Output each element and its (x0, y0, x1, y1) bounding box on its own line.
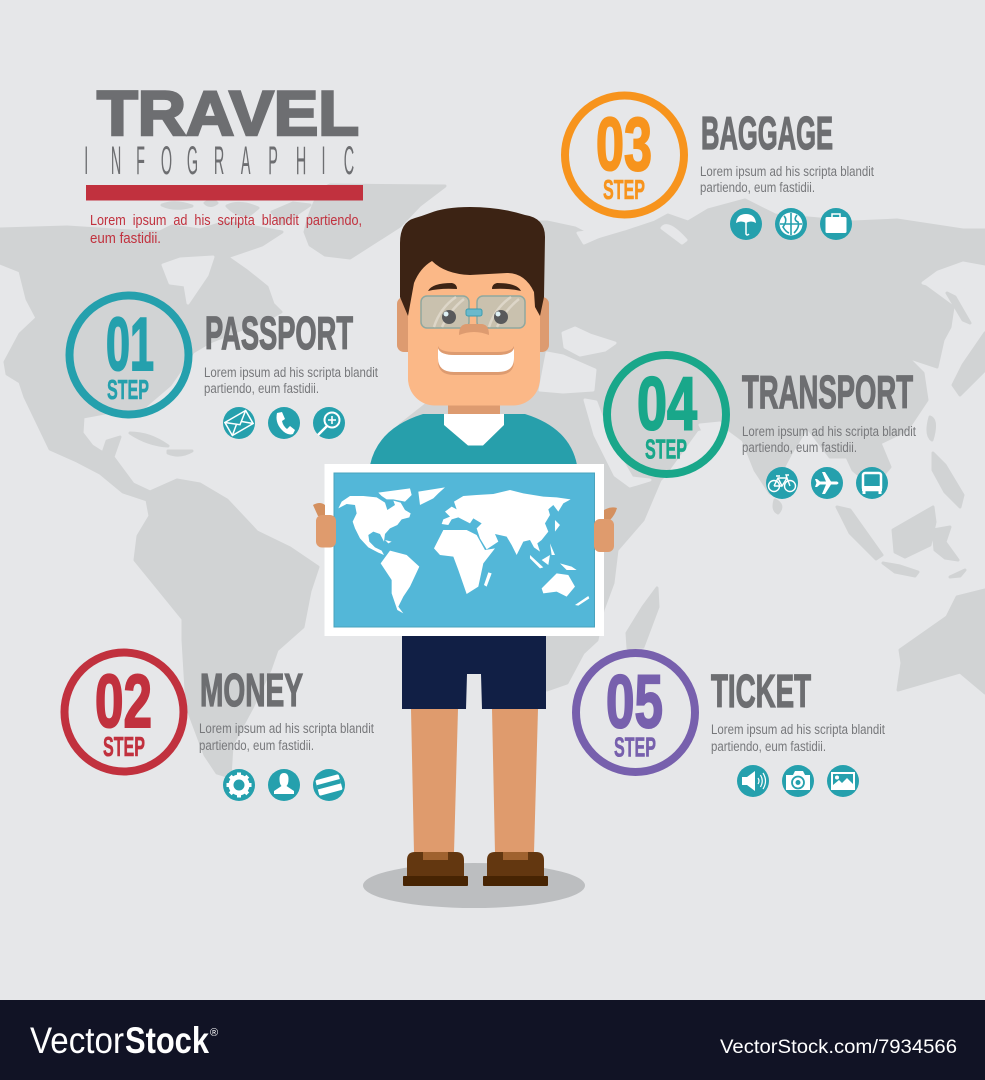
title: travel infographic (84, 79, 363, 247)
subheading: infographic: INFOGRAPHIC (84, 139, 354, 183)
step 02: money (64, 652, 374, 801)
step 03: baggage (565, 96, 874, 240)
heading ticket: TICKET (711, 665, 811, 717)
icon: phone (268, 407, 300, 439)
step ring 01: 01 (106, 302, 154, 386)
step ring 04 (607, 355, 726, 474)
neck (448, 400, 500, 416)
step ring 03: 03 (596, 102, 652, 186)
step ring 03: STEP (603, 174, 645, 205)
step ring 05 (576, 653, 695, 772)
text baggage: Lorem ipsum ad his scripta blandit (700, 164, 874, 179)
icon: bus (856, 467, 888, 499)
step ring 04: STEP (645, 434, 687, 464)
step 05: ticket (576, 653, 885, 797)
text passport (204, 365, 378, 396)
heading passport: PASSPORT (205, 307, 353, 359)
icon: umbrella (730, 208, 762, 240)
title text (90, 213, 362, 247)
step ring 05: 05 (606, 660, 663, 744)
collar (444, 414, 504, 446)
url: VectorStock.com/7934566 (720, 1037, 957, 1058)
icon: briefcase (820, 208, 852, 240)
ears (397, 297, 549, 352)
heading money: MONEY (200, 664, 303, 716)
heading: travel: TRAVEL (97, 79, 359, 149)
logo: ® (210, 1027, 218, 1039)
icon: speaker (737, 765, 769, 797)
step 04: transport (607, 355, 916, 499)
icon: person (268, 769, 300, 801)
step ring 03 (565, 96, 684, 214)
character: man holding map (313, 207, 617, 908)
text passport: partiendo, eum fastidii. (204, 381, 319, 396)
icon: globe (775, 208, 807, 240)
heading baggage: BAGGAGE (701, 107, 833, 159)
background world map (0, 185, 985, 777)
nose (459, 324, 489, 335)
icon: magnifier (313, 407, 345, 439)
eyes (442, 310, 508, 324)
icon: mail (223, 407, 255, 439)
shoes (403, 852, 548, 886)
step 01: passport (70, 296, 378, 439)
ground shadow (363, 863, 585, 908)
icon: credit card (313, 769, 345, 801)
title text: eum fastidii. (90, 231, 161, 247)
text ticket: Lorem ipsum ad his scripta blandit (711, 722, 885, 737)
glasses (421, 296, 525, 328)
step ring 05: STEP (614, 732, 656, 762)
icon: gear (223, 769, 255, 801)
right hand (594, 507, 617, 552)
logo: Stock (125, 1020, 209, 1061)
text baggage: partiendo, eum fastidii. (700, 180, 815, 195)
text ticket: partiendo, eum fastidii. (711, 739, 826, 754)
white world map (338, 487, 589, 613)
red rule (86, 185, 363, 200)
text baggage (700, 164, 874, 195)
step ring 02 (64, 652, 184, 772)
text money: partiendo, eum fastidii. (199, 738, 314, 753)
icon: bicycle (766, 467, 798, 499)
step ring 04: 04 (637, 362, 697, 446)
icon: camera (782, 765, 814, 797)
icon: airplane (811, 467, 843, 499)
map board (324, 464, 604, 636)
step ring 01 (70, 296, 188, 414)
shorts (402, 635, 546, 709)
mouth (438, 346, 514, 375)
face (408, 250, 540, 406)
text money (199, 721, 374, 753)
logo: Vector (30, 1020, 124, 1061)
logo (30, 1020, 218, 1061)
footer bar (0, 1000, 985, 1080)
eyebrows (428, 283, 521, 291)
title text: Lorem ipsum ad his scripta blandit partiendo, (90, 213, 362, 229)
step ring 02: STEP (103, 731, 145, 762)
step ring 01: STEP (107, 374, 149, 405)
text transport (742, 424, 916, 455)
text ticket (711, 722, 885, 754)
text passport: Lorem ipsum ad his scripta blandit (204, 365, 378, 380)
step ring 02: 02 (95, 659, 152, 743)
text money: Lorem ipsum ad his scripta blandit (199, 721, 374, 736)
text transport: partiendo, eum fastidii. (742, 440, 857, 455)
icon: picture (827, 765, 859, 797)
text transport: Lorem ipsum ad his scripta blandit (742, 424, 916, 439)
shirt (370, 414, 577, 465)
hair (400, 207, 545, 316)
left hand (313, 503, 336, 548)
legs (411, 709, 538, 853)
